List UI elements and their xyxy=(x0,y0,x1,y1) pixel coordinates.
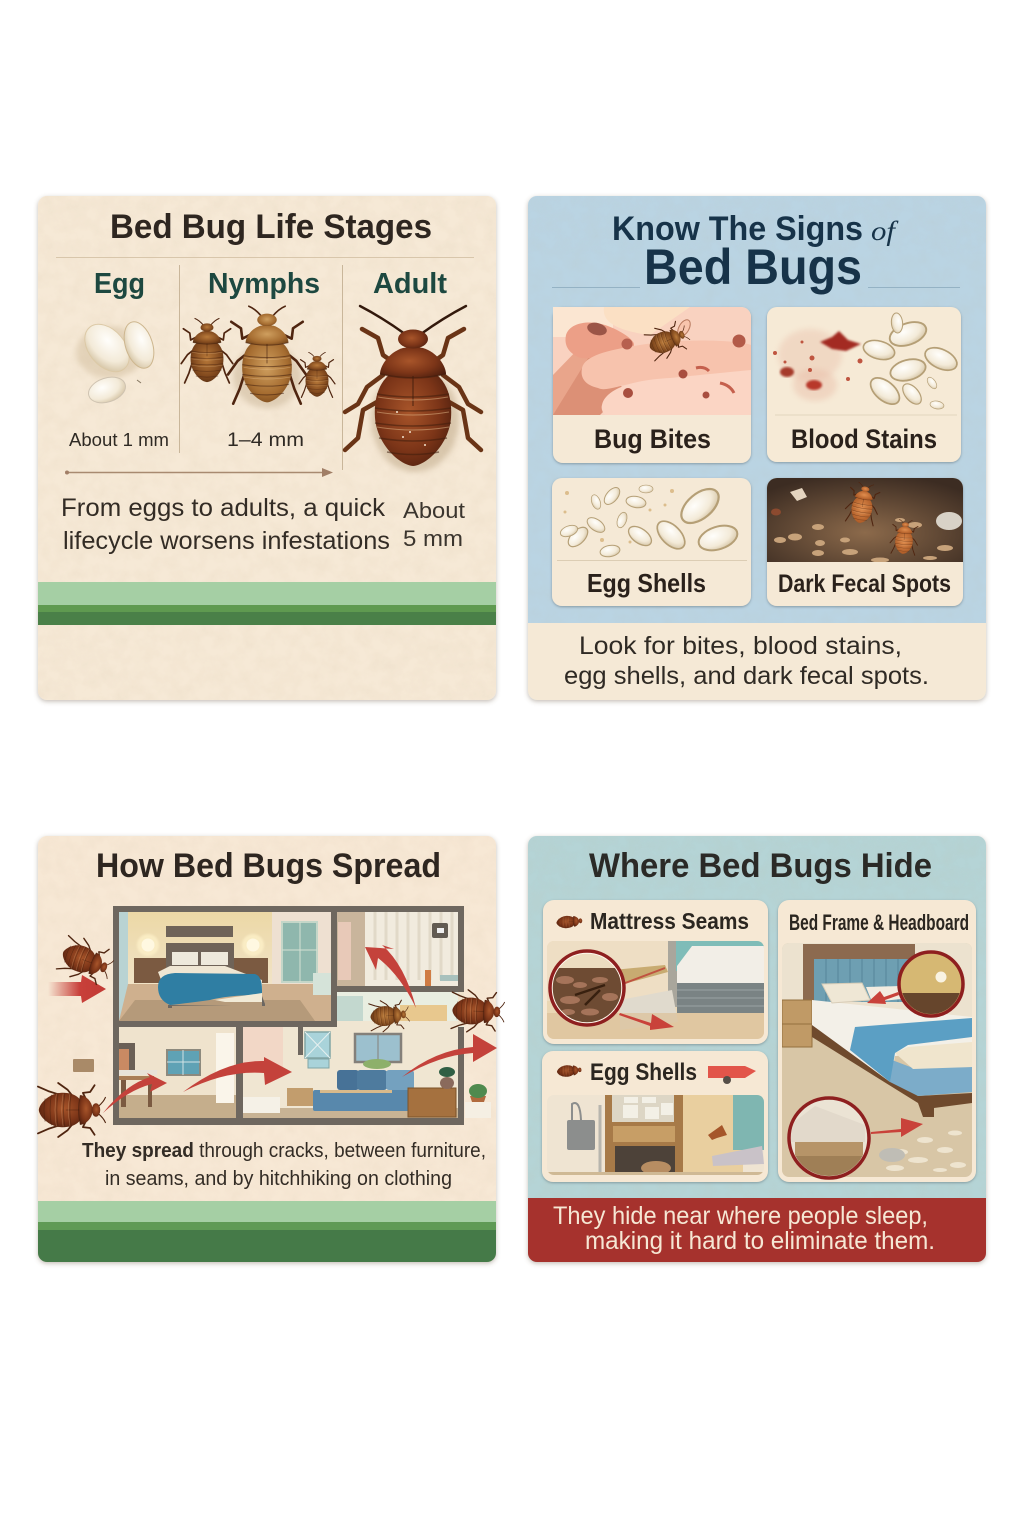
card: blood stains xyxy=(767,307,961,462)
icon: bug bottom left xyxy=(38,1083,105,1137)
label: bug bites: Bug Bites xyxy=(594,424,711,454)
heading: bed bugs: Bed Bugs xyxy=(644,239,862,295)
room: living room xyxy=(243,1027,458,1118)
room: middle xyxy=(337,992,464,1029)
scene: bed xyxy=(782,943,972,1177)
callout: seam close-up xyxy=(550,951,624,1025)
label: egg shells: Egg Shells xyxy=(587,568,706,598)
label: egg: Egg xyxy=(94,268,145,300)
heading: hide: Where Bed Bugs Hide xyxy=(589,847,932,885)
heading: of: of xyxy=(871,216,899,246)
arrow: to upper room xyxy=(365,945,416,1008)
card: bug bites xyxy=(553,307,751,463)
card: egg shells xyxy=(552,478,751,606)
arrow: headboard xyxy=(867,991,899,1004)
label: adult: Adult xyxy=(373,268,447,300)
text: lifecycle: lifecycle worsens infestations xyxy=(63,527,390,555)
text: spread: They spread through cracks, between furniture, xyxy=(82,1140,486,1162)
diagram: house xyxy=(113,906,464,1125)
arrow: egg shells xyxy=(708,1066,756,1084)
card: bed frame and headboard xyxy=(778,900,976,1182)
room: top right xyxy=(337,912,458,986)
label: blood stains: Blood Stains xyxy=(791,424,937,454)
icon: brick xyxy=(73,1059,94,1072)
icon: bug top left xyxy=(55,933,117,989)
arrow: seam xyxy=(619,1013,674,1030)
icon: bug xyxy=(556,915,583,929)
arrow: frame xyxy=(871,1118,923,1137)
caption: hide xyxy=(553,1202,935,1255)
arrow: middle xyxy=(183,1057,292,1092)
panel: life stages xyxy=(38,196,496,700)
arrow: lower left xyxy=(103,1073,167,1113)
scene: egg shells xyxy=(547,1095,764,1175)
label: mattress seams: Mattress Seams xyxy=(590,908,749,934)
callout: frame close-up xyxy=(789,1098,869,1178)
heading: spread: How Bed Bugs Spread xyxy=(96,847,441,885)
caption: signs: egg shells, and dark fecal spots. xyxy=(564,662,929,690)
icon: bug centre xyxy=(369,998,410,1033)
label: nymphs: Nymphs xyxy=(208,268,320,300)
text: spread xyxy=(82,1140,486,1190)
caption: signs: Look for bites, blood stains, xyxy=(579,632,902,660)
panel: signs xyxy=(528,196,986,700)
icon: nymphs xyxy=(181,306,335,408)
room: lower left xyxy=(119,1027,236,1118)
size: egg: About 1 mm xyxy=(69,430,169,450)
card: dark fecal spots xyxy=(767,478,963,606)
heading: life stages: Bed Bug Life Stages xyxy=(110,208,432,246)
size: adult: 5 mm xyxy=(403,526,463,551)
icon: bug right xyxy=(451,989,505,1033)
size: adult xyxy=(403,498,465,551)
heading: know the signs: Know The Signs xyxy=(612,210,863,248)
text: spread: in seams, and by hitchhiking on clothing xyxy=(105,1168,452,1190)
size: nymphs: 1–4 mm xyxy=(227,430,304,451)
callout: headboard close-up xyxy=(899,952,963,1017)
panel: spread xyxy=(38,836,505,1262)
scene: mattress xyxy=(547,941,764,1039)
icon: adult bed bug xyxy=(345,306,481,472)
card: egg shells xyxy=(542,1051,768,1182)
icon: eggs xyxy=(76,316,159,407)
icon: plant xyxy=(465,1084,491,1118)
text: lifecycle xyxy=(61,494,390,555)
arrow: entry xyxy=(48,975,106,1003)
label: dark fecal spots: Dark Fecal Spots xyxy=(778,570,951,598)
card: mattress seams xyxy=(543,900,768,1044)
icon: bug xyxy=(556,1064,582,1078)
label: egg shells: Egg Shells xyxy=(590,1059,697,1086)
arrow: growth xyxy=(65,468,333,477)
caption: hide: making it hard to eliminate them. xyxy=(585,1227,935,1255)
size: adult: About xyxy=(403,498,465,523)
caption: hide: They hide near where people sleep, xyxy=(553,1202,928,1230)
text: lifecycle: From eggs to adults, a quick xyxy=(61,494,386,522)
panel: hide xyxy=(528,836,986,1262)
caption: signs xyxy=(564,632,929,690)
arrow: exit xyxy=(402,1034,497,1077)
room: bedroom xyxy=(119,912,331,1021)
